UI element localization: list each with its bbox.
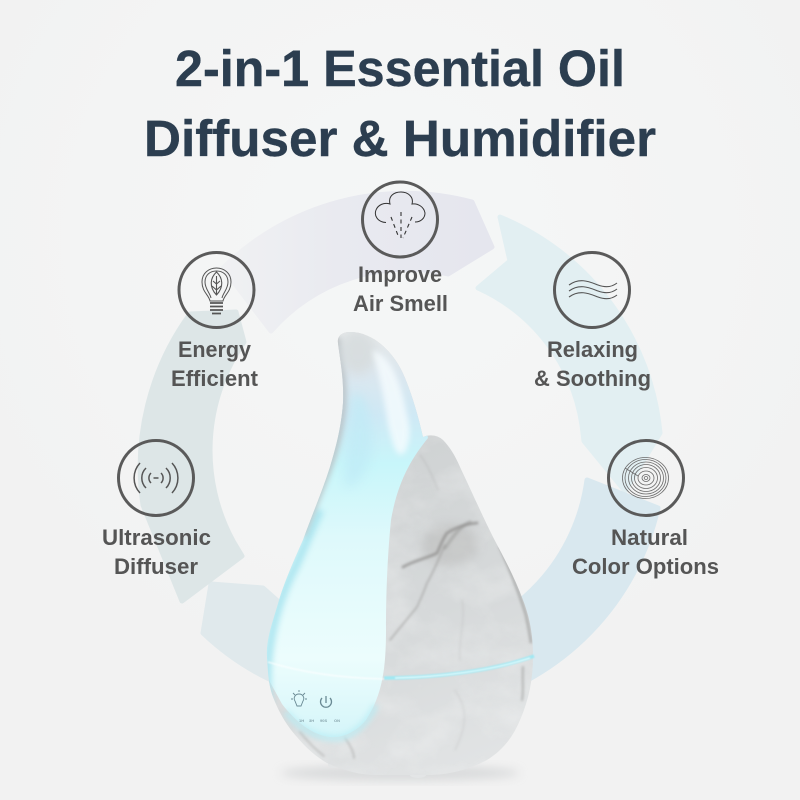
shell edge glow xyxy=(267,510,320,705)
circular arrow ring xyxy=(140,193,660,703)
control labels: 90S xyxy=(320,718,327,723)
icon: power button xyxy=(320,696,332,707)
label: relaxing and soothing xyxy=(534,337,651,391)
diffuser xyxy=(258,325,540,785)
label: ultrasonic diffuser: Diffuser xyxy=(114,554,198,579)
touch controls xyxy=(291,690,340,723)
marble base xyxy=(269,336,533,766)
flame top marble xyxy=(346,332,374,373)
icon: waves xyxy=(554,252,630,328)
arrow: left xyxy=(140,312,244,601)
label: natural color options: Natural xyxy=(611,525,688,550)
label: improve air smell: Air Smell xyxy=(353,291,448,316)
feature: energy efficient xyxy=(171,252,259,391)
marble veins xyxy=(299,520,532,758)
control labels: 3H xyxy=(309,718,314,723)
shadow under diffuser xyxy=(280,765,520,781)
feature: relaxing and soothing xyxy=(534,252,651,391)
light ring xyxy=(268,656,534,679)
glowing shell xyxy=(258,328,428,737)
label: ultrasonic diffuser: Ultrasonic xyxy=(102,525,211,550)
title: Diffuser & Humidifier xyxy=(144,110,656,167)
label: relaxing and soothing: & Soothing xyxy=(534,366,651,391)
icon: leaf light bulb xyxy=(179,252,254,328)
icon: light button xyxy=(291,690,307,706)
arrow: right xyxy=(478,217,660,491)
marble mottling xyxy=(388,473,504,614)
label: energy efficient xyxy=(171,337,259,391)
feature: ultrasonic diffuser xyxy=(102,440,211,579)
label: energy efficient: Efficient xyxy=(171,366,259,391)
label: natural color options: Color Options xyxy=(572,554,719,579)
title: 2-in-1 Essential Oil xyxy=(175,40,625,97)
arrow: lower right xyxy=(440,480,658,703)
label: improve air smell: Improve xyxy=(358,262,442,287)
diffuser body xyxy=(258,325,540,785)
diffuser feet xyxy=(328,762,426,778)
label: ultrasonic diffuser xyxy=(102,525,211,579)
flame rim xyxy=(302,338,343,535)
bottom edge glow xyxy=(286,705,376,738)
title xyxy=(144,40,656,167)
label: energy efficient: Energy xyxy=(178,337,252,362)
control labels: 1H xyxy=(299,718,304,723)
marble dark patch xyxy=(422,525,478,565)
icon: ultrasonic waves xyxy=(118,440,194,516)
icon: tree rings xyxy=(608,440,684,516)
feature: improve air smell xyxy=(353,182,448,316)
label: natural color options xyxy=(572,525,719,579)
flame highlight xyxy=(372,350,410,455)
arrow: top xyxy=(223,193,492,331)
label: improve air smell xyxy=(353,262,448,316)
flame blue core xyxy=(351,396,368,475)
control labels xyxy=(299,718,340,723)
feature: natural color options xyxy=(572,440,719,579)
label: relaxing and soothing: Relaxing xyxy=(547,337,638,362)
control labels: ON xyxy=(334,718,340,723)
icon: cloud with mist xyxy=(362,182,438,257)
arrow: lower left xyxy=(203,584,350,700)
